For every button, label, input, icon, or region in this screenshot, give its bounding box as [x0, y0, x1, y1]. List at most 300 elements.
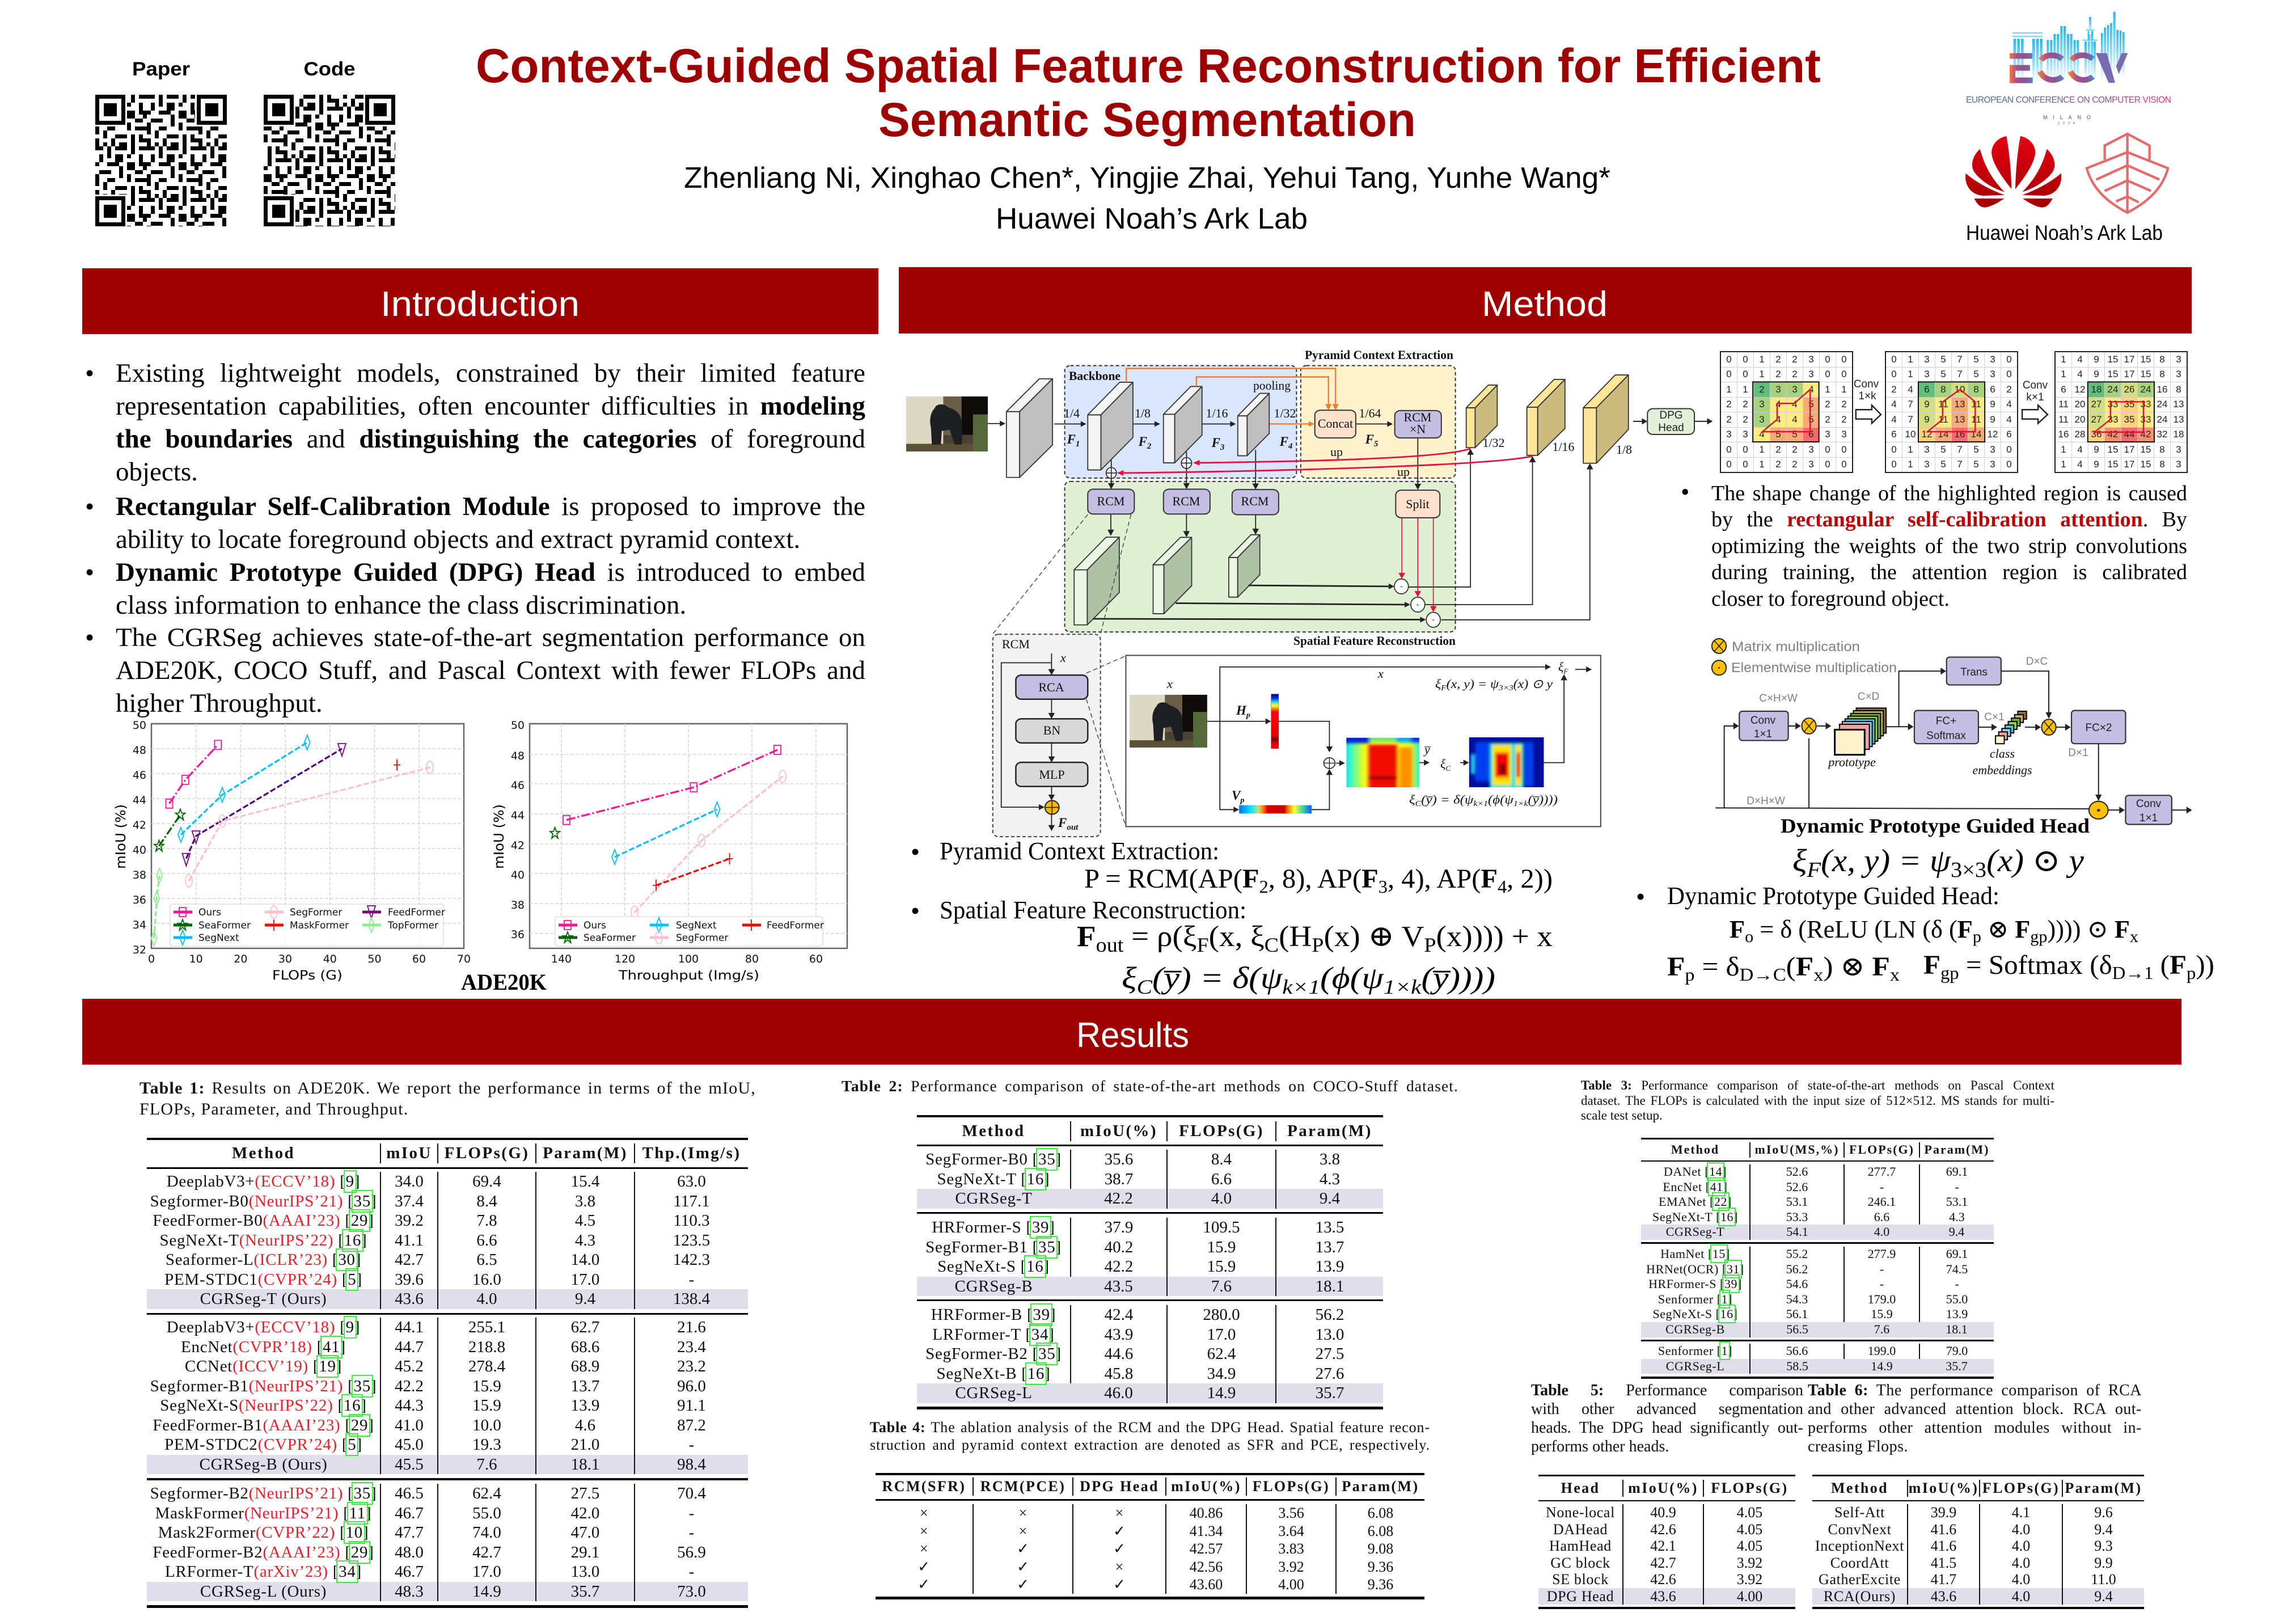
architecture text labels: F — [1365, 432, 1374, 446]
matrix: after kx1 conv: 4 — [2077, 369, 2083, 379]
table 1: Method — [232, 1144, 295, 1162]
text: intro bullet 1 — [116, 358, 865, 487]
matrix: after 1xk conv: 9 — [1990, 399, 1995, 410]
chart: mIoU vs FLOPs: SeaFormer — [198, 920, 251, 931]
table 6: mIoU(%) — [1909, 1480, 1978, 1496]
matrix: after kx1 conv: 20 — [2075, 414, 2085, 425]
RCM and RCA text labels: F — [1440, 684, 1447, 693]
text: intro bullet 4: ADE20K, COCO Stuff, and Pascal Context with fewer FLOPs and — [116, 656, 865, 685]
matrix: after kx1 conv: 24 — [2108, 384, 2118, 395]
table 2: SegFormer-B1 [35] — [925, 1238, 1062, 1256]
matrix: after 1xk conv: 10 — [1955, 384, 1965, 395]
DPG head text labels: D×1 — [2068, 747, 2088, 759]
matrix: after kx1 conv: 27 — [2091, 414, 2102, 425]
matrix: after kx1 conv: 13 — [2174, 399, 2184, 410]
chart: mIoU vs Throughput: 60 — [809, 953, 823, 965]
DPG head text labels: D×H×W — [1747, 795, 1785, 807]
equation: xi C: (y̅) = δ(ψ — [1152, 961, 1283, 995]
matrix: after kx1 conv: 33 — [2108, 414, 2118, 425]
equation: F o: F — [2015, 915, 2030, 943]
table 3: 58.5 — [1786, 1359, 1808, 1373]
chart: mIoU vs Throughput: 42 — [511, 839, 525, 852]
table 4: ✓ — [917, 1576, 931, 1593]
table 3: 246.1 — [1868, 1194, 1896, 1209]
table 1: 44.7 — [395, 1337, 424, 1356]
matrix: after 1xk conv: 4 — [1908, 384, 1913, 395]
table 4: ✓ — [1113, 1576, 1126, 1593]
matrix: after kx1 conv: 15 — [2141, 444, 2151, 455]
table 2: 13.7 — [1316, 1238, 1344, 1256]
equation: xi C: (ϕ(ψ — [1320, 961, 1384, 995]
chart: mIoU vs FLOPs: 70 — [457, 953, 471, 965]
DPG head text labels: FC+ — [1936, 715, 1956, 727]
equation: F out: (x, ξ — [1209, 921, 1265, 953]
matrix: input: 1 — [1759, 444, 1765, 455]
table 2: 27.6 — [1316, 1365, 1344, 1383]
matrix: after 1xk conv: 2 — [1891, 384, 1897, 395]
table 1: 6.6 — [476, 1231, 497, 1249]
table 1: 9.4 — [575, 1290, 595, 1308]
table 2: 14.9 — [1207, 1384, 1236, 1402]
table 4: × — [1019, 1523, 1027, 1539]
matrix: input: 3 — [1808, 369, 1814, 379]
matrix: after kx1 conv: 42 — [2108, 429, 2118, 440]
table 6 caption: creasing Flops. — [1808, 1438, 1908, 1455]
table 4: 43.60 — [1190, 1576, 1223, 1593]
text: intro bullet 1: Existing lightweight models, constrained by their limited feature — [116, 358, 865, 388]
table 1: 218.8 — [468, 1337, 505, 1356]
RCM and RCA text labels: BN — [1043, 723, 1060, 737]
table 2: HRFormer-S [39] — [932, 1218, 1055, 1236]
architecture text labels: 1/32 — [1274, 406, 1296, 420]
matrix: after 1xk conv: 0 — [1891, 354, 1897, 365]
matrix: after 1xk conv: 3 — [1924, 354, 1930, 365]
matrix: after 1xk conv: 9 — [1924, 414, 1930, 425]
table 4: 9.08 — [1368, 1540, 1393, 1557]
chart: mIoU vs Throughput: 48 — [511, 750, 525, 762]
table 5: Head — [1561, 1480, 1600, 1496]
table 5: 3.92 — [1737, 1554, 1762, 1571]
chart: mIoU vs FLOPs: SegNext — [198, 932, 239, 944]
table 2: mIoU(%) — [1080, 1122, 1157, 1140]
matrix: after kx1 conv: 18 — [2091, 384, 2102, 395]
chart: mIoU vs FLOPs: Ours — [198, 907, 221, 918]
equation: F gp: gp — [1940, 963, 1959, 983]
chart: mIoU vs Throughput: 100 — [678, 953, 699, 965]
table 1: CGRSeg-T (Ours) — [200, 1290, 327, 1308]
matrix: input: 0 — [1743, 369, 1748, 379]
table 2: Param(M) — [1287, 1122, 1372, 1140]
table 1: 39.6 — [395, 1270, 424, 1289]
chart: mIoU vs FLOPs: 30 — [278, 953, 292, 965]
table 1: 45.5 — [395, 1455, 424, 1474]
RCM and RCA text labels: ξ — [1435, 677, 1440, 691]
equation: F p: ( — [1786, 952, 1796, 982]
heading: Introduction: Introduction — [380, 285, 580, 324]
RCM and RCA text labels: RCA — [1038, 680, 1064, 694]
table 2: 15.9 — [1207, 1257, 1236, 1276]
table 3: - — [1955, 1180, 1959, 1194]
table 1: 56.9 — [677, 1543, 706, 1561]
matrix: after kx1 conv: 44 — [2124, 429, 2134, 440]
matrix: after 1xk conv: 11 — [1971, 414, 1981, 425]
matrix: after kx1 conv: 9 — [2094, 354, 2099, 365]
table 1: 17.0 — [472, 1563, 501, 1581]
table 1: SegNeXt-T(NeurIPS’22) [16] — [160, 1231, 367, 1249]
table 4: 6.08 — [1368, 1523, 1393, 1539]
table 1: 34.0 — [395, 1172, 424, 1191]
table 5 caption — [1531, 1382, 1803, 1455]
matrix: after kx1 conv: 1 — [2061, 459, 2066, 470]
table 2: 42.4 — [1105, 1306, 1133, 1324]
matrix: input: 0 — [1841, 444, 1847, 455]
table 2: 17.0 — [1207, 1325, 1236, 1343]
table 3: HRNet(OCR) [31] — [1646, 1262, 1744, 1276]
table 1: FeedFormer-B0(AAAI’23) [29] — [153, 1211, 374, 1230]
matrix: after kx1 conv — [2054, 351, 2188, 473]
matrix: after kx1 conv: 27 — [2091, 399, 2102, 410]
table 1: LRFormer-T(arXiv’23) [34] — [165, 1563, 362, 1581]
matrix: after kx1 conv: 4 — [2077, 459, 2083, 470]
table 1: 4.0 — [476, 1290, 497, 1308]
RCM and RCA text labels: F — [1058, 816, 1067, 830]
table 1: 278.4 — [468, 1357, 505, 1375]
text: rectangular self-calibration attention description: optimizing the weights of the two strip convolutions — [1711, 534, 2187, 558]
chart: mIoU vs Throughput: 40 — [511, 869, 525, 881]
table 1: 42.2 — [395, 1377, 424, 1395]
matrix: after 1xk conv: 3 — [1990, 354, 1995, 365]
table 4: Param(M) — [1342, 1478, 1419, 1495]
panel: Spatial Feature Reconstruction — [1065, 482, 1456, 632]
matrix: after 1xk conv: 7 — [1957, 459, 1963, 470]
matrix: after kx1 conv: 42 — [2141, 429, 2151, 440]
panel: RCA detail — [1126, 656, 1601, 826]
table 3: 55.0 — [1946, 1292, 1968, 1306]
table 4 caption: Table 4: The ablation analysis of the RCM and the DPG Head. Spatial feature recon- — [870, 1419, 1430, 1436]
table 1: 255.1 — [468, 1318, 505, 1336]
equation: P: , 2)) — [1507, 864, 1553, 894]
table 1: 35.7 — [571, 1582, 599, 1601]
matrix: input: 1 — [1825, 384, 1830, 395]
chart: mIoU vs FLOPs: mIoU (%) — [113, 804, 129, 869]
table 1: 45.2 — [395, 1357, 424, 1375]
chart: mIoU vs FLOPs: MaskFormer — [290, 920, 349, 931]
matrix: after 1xk conv: 7 — [1908, 414, 1913, 425]
table 5: 4.05 — [1737, 1521, 1762, 1537]
text: intro bullet 1: the boundaries and distinguishing the categories of foreground — [116, 424, 865, 454]
equation: F o: F — [1730, 915, 1745, 943]
table 3: Senformer [1] — [1658, 1292, 1732, 1306]
table 6: 11.0 — [2091, 1571, 2116, 1588]
table 4: 41.34 — [1190, 1523, 1223, 1539]
table 2: 6.6 — [1211, 1170, 1232, 1188]
table 2: 40.2 — [1105, 1238, 1133, 1256]
table 2: 18.1 — [1316, 1277, 1344, 1295]
table 2: CGRSeg-B — [955, 1277, 1033, 1295]
table 2: 42.2 — [1104, 1189, 1133, 1208]
heading: Results: Results — [1076, 1016, 1189, 1055]
logo: ECCV: MILANO — [2043, 115, 2091, 121]
chart: mIoU vs Throughput: Ours — [583, 920, 606, 931]
table 1 — [147, 1138, 748, 1608]
table 1: 142.3 — [673, 1251, 710, 1269]
table 5 caption: heads. The DPG head significantly out- — [1531, 1419, 1803, 1437]
table 1: 73.0 — [677, 1582, 706, 1601]
equation: F out: (H — [1279, 921, 1312, 953]
table 1: 39.2 — [395, 1211, 424, 1230]
chart: mIoU vs Throughput: SegFormer — [676, 932, 728, 944]
RCM and RCA text labels: V — [1232, 788, 1240, 803]
RCM and RCA text labels: H — [1236, 703, 1246, 717]
DPG head text labels: class — [1990, 746, 2015, 761]
matrix: input: 0 — [1743, 459, 1748, 470]
matrix: after kx1 conv: 24 — [2157, 414, 2167, 425]
table 2: 109.5 — [1203, 1218, 1240, 1236]
equation: P: , 8), AP( — [1268, 864, 1361, 894]
RCM and RCA text labels: ξ — [1440, 757, 1445, 771]
icon: class embeddings stack — [1995, 711, 2027, 744]
table 2: SegNeXt-S [16] — [937, 1257, 1050, 1276]
chart: mIoU vs Throughput: 120 — [615, 953, 635, 965]
matrix: after kx1 conv: 16 — [2058, 429, 2069, 440]
table 4: ✓ — [917, 1559, 931, 1575]
table 1: 13.7 — [571, 1377, 599, 1395]
matrix: after kx1 conv: 9 — [2094, 459, 2099, 470]
table 1: 47.0 — [571, 1523, 599, 1542]
matrix: after kx1 conv: 33 — [2141, 399, 2151, 410]
matrix: after kx1 conv: 24 — [2141, 384, 2151, 395]
title: Semantic Segmentation — [878, 93, 1416, 146]
matrix: input: 3 — [1841, 429, 1847, 440]
equation: F gp: F — [1923, 950, 1940, 980]
matrix: after kx1 conv: 3 — [2176, 354, 2181, 365]
matrix: input: 3 — [1792, 384, 1798, 395]
table 2: SegNeXt-B [16] — [936, 1365, 1051, 1383]
table 4: 42.56 — [1190, 1559, 1223, 1575]
matrix: after kx1 conv: 15 — [2108, 369, 2118, 379]
table 1: 91.1 — [677, 1396, 706, 1415]
table 2: 42.2 — [1105, 1257, 1133, 1276]
text: intro bullet 3 — [116, 558, 865, 620]
table 1: 21.6 — [677, 1318, 706, 1336]
table 5 caption: Table 5: Performance comparison — [1531, 1382, 1803, 1399]
architecture text labels: 1 — [1076, 440, 1080, 449]
conv arrow labels: 1×k — [1858, 390, 1876, 402]
DPG head text labels: Trans — [1960, 666, 1988, 678]
table 4 caption: struction and pyramid context extraction are denoted as SFR and PCE, respectively. — [870, 1437, 1430, 1453]
chart: mIoU vs Throughput: mIoU (%) — [491, 804, 507, 869]
table 3 caption: scale test setup. — [1581, 1108, 1663, 1122]
table 3: Method — [1671, 1142, 1719, 1156]
table 1: 14.9 — [472, 1582, 501, 1601]
chart: mIoU vs FLOPs: 44 — [133, 794, 146, 807]
table 3: 53.3 — [1786, 1210, 1808, 1224]
table 1: 15.9 — [472, 1396, 501, 1415]
chart: mIoU vs FLOPs: 10 — [189, 953, 203, 965]
table 3: - — [1880, 1180, 1884, 1194]
table 4: 3.64 — [1278, 1523, 1304, 1539]
matrix: after kx1 conv: 8 — [2159, 444, 2165, 455]
table 1: 21.0 — [571, 1436, 599, 1454]
table 3: 54.6 — [1786, 1277, 1808, 1291]
matrix: after 1xk conv: 13 — [1955, 414, 1965, 425]
text: rectangular self-calibration attention description: The shape change of the highlighted region is caused — [1711, 482, 2187, 505]
table 5 — [1538, 1475, 1795, 1609]
bullet: Spatial Feature Reconstruction: • — [911, 896, 920, 925]
table 3: FLOPs(G) — [1849, 1142, 1914, 1156]
table 6: 9.9 — [2094, 1554, 2113, 1571]
spatial reconstruction feature blocks — [1074, 535, 1260, 625]
architecture text labels: up — [1330, 445, 1343, 459]
table 1: 48.3 — [395, 1582, 424, 1601]
matrix: after 1xk conv: 6 — [1924, 384, 1930, 395]
matrix: after kx1 conv: 33 — [2108, 399, 2118, 410]
table 2: 43.5 — [1104, 1277, 1133, 1295]
table 3: 4.3 — [1949, 1210, 1965, 1224]
table 5: None-local — [1546, 1504, 1615, 1521]
matrix: input: 2 — [1792, 459, 1798, 470]
table 1: 8.4 — [476, 1192, 497, 1210]
table 3: 14.9 — [1871, 1359, 1893, 1373]
DPG legend: matrix multiplication: Matrix multiplication — [1732, 639, 1860, 655]
logo: Noah's Ark — [2087, 134, 2168, 213]
DPG head text labels: Conv — [2136, 798, 2162, 810]
matrix: after 1xk conv: 14 — [1971, 429, 1981, 440]
table 4: DPG Head — [1080, 1478, 1159, 1495]
architecture text labels: 4 — [1288, 442, 1293, 451]
equation: P: , 4), AP( — [1388, 864, 1481, 894]
table 1: 43.6 — [395, 1290, 424, 1308]
matrix: after kx1 conv: 1 — [2061, 444, 2066, 455]
table 2 — [917, 1115, 1383, 1409]
matrix: after kx1 conv: 15 — [2108, 354, 2118, 365]
logo caption: Huawei Noah's Ark Lab: Huawei Noah’s Ark Lab — [1966, 221, 2163, 244]
table 4: ✓ — [1113, 1523, 1126, 1539]
table 1: CGRSeg-B (Ours) — [200, 1455, 327, 1474]
table 1: 44.1 — [395, 1318, 424, 1336]
chart: mIoU vs FLOPs: 48 — [133, 744, 146, 757]
table 2: FLOPs(G) — [1179, 1122, 1264, 1140]
table 3: 13.9 — [1946, 1307, 1968, 1321]
table 5: 3.92 — [1737, 1571, 1762, 1588]
table 3: mIoU(MS,%) — [1755, 1142, 1839, 1156]
table 4: 42.57 — [1190, 1540, 1223, 1557]
table 3: 35.7 — [1946, 1359, 1968, 1373]
matrix: input: 3 — [1759, 399, 1765, 410]
table 2: HRFormer-B [39] — [931, 1306, 1056, 1324]
table 2: LRFormer-T [34] — [932, 1325, 1055, 1343]
table 3: 79.0 — [1946, 1344, 1968, 1358]
table 2: 15.9 — [1207, 1238, 1236, 1256]
matrix: after 1xk conv: 4 — [1891, 399, 1897, 410]
matrix: after 1xk conv: 3 — [1990, 444, 1995, 455]
table 3: HRFormer-S [39] — [1648, 1277, 1742, 1291]
table 3: 56.1 — [1786, 1307, 1808, 1321]
RCM and RCA text labels: y̅ — [1423, 742, 1431, 757]
table 3: EMANet [22] — [1659, 1194, 1732, 1209]
matrix: after kx1 conv: 1 — [2061, 354, 2066, 365]
table 3: DANet [14] — [1664, 1164, 1727, 1179]
RCM and RCA text labels — [1002, 637, 1568, 832]
RCM and RCA text labels: (y̅)))) — [1528, 792, 1558, 807]
table 3: 52.6 — [1786, 1180, 1808, 1194]
table 2: 4.0 — [1211, 1189, 1232, 1208]
matrix: input: 0 — [1825, 444, 1830, 455]
matrix: after kx1 conv: 17 — [2124, 459, 2134, 470]
matrix: input: 5 — [1808, 414, 1814, 425]
table 1: 27.5 — [571, 1484, 599, 1502]
matrix: input: 1 — [1759, 354, 1765, 365]
table 1: 4.6 — [575, 1416, 595, 1434]
text: intro bullet 2: Rectangular Self-Calibration Module is proposed to improve the — [116, 492, 865, 521]
architecture text labels: 2 — [1147, 442, 1152, 451]
table 1: MaskFormer(NeurIPS’21) [11] — [155, 1504, 371, 1522]
table 2: 46.0 — [1104, 1384, 1133, 1402]
chart: mIoU vs FLOPs: 50 — [133, 719, 146, 732]
chart: mIoU vs FLOPs: TopFormer — [387, 920, 438, 931]
chart: mIoU vs Throughput: 46 — [511, 779, 525, 792]
table 1 caption — [139, 1079, 756, 1118]
table 1: 138.4 — [673, 1290, 710, 1308]
equation: F p: F — [1796, 952, 1813, 982]
matrix: after kx1 conv: 13 — [2174, 414, 2184, 425]
table 4: ✓ — [1017, 1576, 1029, 1593]
table 2: 43.9 — [1105, 1325, 1133, 1343]
equation: F out: C — [1265, 934, 1279, 956]
RCM and RCA text labels: F — [1563, 667, 1568, 676]
equation: xi F: F — [1806, 858, 1821, 882]
equation: F out: out — [1096, 934, 1123, 956]
table 1: 14.0 — [571, 1251, 599, 1269]
matrix: input: 2 — [1726, 414, 1732, 425]
authors: Zhenliang Ni, Xinghao Chen*, Yingjie Zhai, Yehui Tang, Yunhe Wang* — [684, 162, 1610, 195]
table 1: 46.7 — [395, 1504, 424, 1522]
text: intro bullet 1: representation capabilities, often encounter difficulties in modeling — [116, 391, 865, 421]
table 4: ✓ — [1017, 1559, 1029, 1575]
label: Code: Code — [304, 58, 355, 80]
matrix: after kx1 conv: 8 — [2159, 369, 2165, 379]
table 1: 42.7 — [395, 1251, 424, 1269]
table 4: 9.36 — [1368, 1559, 1393, 1575]
table 3 caption: dataset. The FLOPs is calculated with the input size of 512×512. MS stands for multi- — [1581, 1094, 2054, 1107]
chart: mIoU vs FLOPs: 38 — [133, 869, 146, 881]
chart: mIoU vs Throughput: 80 — [745, 953, 759, 965]
text: rectangular self-calibration attention description — [1711, 482, 2187, 611]
matrix: after 1xk conv: 7 — [1957, 369, 1963, 379]
table 3: 15.9 — [1871, 1307, 1893, 1321]
table 1: CCNet(ICCV’19) [19] — [185, 1357, 342, 1375]
table 1: 46.7 — [395, 1563, 424, 1581]
bullet marker: intro 1: • — [85, 358, 94, 387]
icon: prototype stack — [1835, 708, 1886, 755]
equation: F gp: ( — [2153, 950, 2170, 980]
DPG head text labels: FC×2 — [2086, 722, 2112, 734]
table 5: mIoU(%) — [1628, 1480, 1698, 1496]
matrix: after kx1 conv: 15 — [2141, 459, 2151, 470]
table 2: 38.7 — [1105, 1170, 1133, 1188]
table 4: × — [1019, 1505, 1027, 1521]
equation: F gp: )) — [2196, 950, 2214, 980]
DPG head text labels: Conv — [1750, 715, 1776, 727]
table 1: 37.4 — [395, 1192, 424, 1210]
bullet: Spatial Feature Reconstruction: Spatial Feature Reconstruction: — [940, 896, 1246, 924]
decoder feature blocks — [1466, 375, 1629, 463]
chart: mIoU vs FLOPs: FLOPs (G) — [272, 969, 343, 983]
matrix: after 1xk conv: 6 — [1891, 429, 1897, 440]
table 4: × — [1115, 1559, 1123, 1575]
table 1: PEM-STDC1(CVPR’24) [5] — [164, 1270, 362, 1289]
table 3: 7.6 — [1874, 1322, 1889, 1336]
